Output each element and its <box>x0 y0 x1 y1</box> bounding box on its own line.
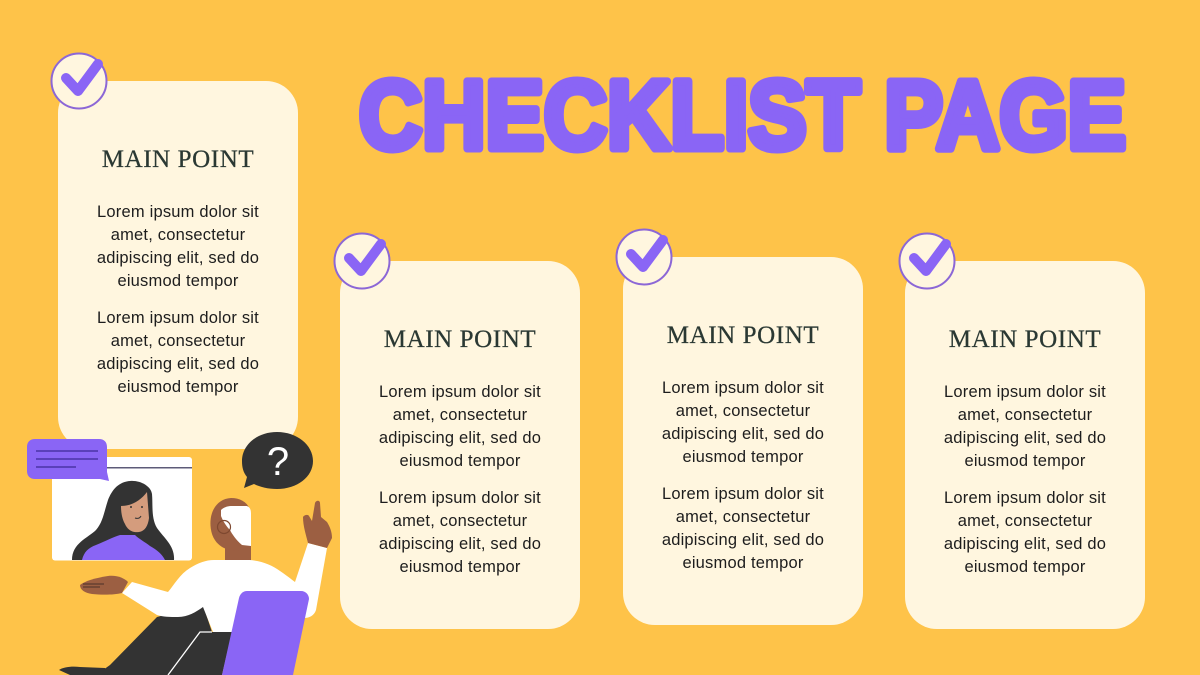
text block: panel 3 first paragraph: Lorem ipsum dolor sit <box>662 379 824 397</box>
text block: panel 3 first paragraph: amet, consectetur <box>676 402 810 420</box>
text block: panel 4 second paragraph: adipiscing elit, sed do <box>944 535 1106 553</box>
text block: panel 1 second paragraph: adipiscing elit, sed do <box>97 355 259 373</box>
text block: panel 2 second paragraph: adipiscing elit, sed do <box>379 535 541 553</box>
icon: check badge 2 <box>334 232 390 290</box>
text block: panel 4 first paragraph <box>944 383 1106 470</box>
text block: panel 1 first paragraph: eiusmod tempor <box>117 272 239 290</box>
text block: panel 4 first paragraph: adipiscing elit, sed do <box>944 429 1106 447</box>
text block: panel 4 second paragraph: Lorem ipsum dolor sit <box>944 489 1106 507</box>
text block: panel 1 first paragraph: adipiscing elit, sed do <box>97 249 259 267</box>
text block: panel 3 second paragraph: adipiscing elit, sed do <box>662 531 824 549</box>
icon: check badge 3 <box>616 228 672 286</box>
panel: main point 1 <box>58 81 298 449</box>
text block: panel 1 second paragraph: amet, consectetur <box>111 332 245 350</box>
text block: panel 4 first paragraph: amet, consectetur <box>958 406 1092 424</box>
text block: panel 2 second paragraph: Lorem ipsum dolor sit <box>379 489 541 507</box>
icon: check badge 4 <box>898 232 956 290</box>
text block: panel 2 first paragraph: amet, consectetur <box>393 406 527 424</box>
text block: panel 4 first paragraph: Lorem ipsum dolor sit <box>944 383 1106 401</box>
text block: panel 3 second paragraph: Lorem ipsum dolor sit <box>662 485 824 503</box>
title: CHECKLIST PAGE <box>359 60 1126 170</box>
text block: panel 1 first paragraph: amet, consectetur <box>111 226 245 244</box>
text block: panel 1 second paragraph: Lorem ipsum dolor sit <box>97 309 259 327</box>
text block: panel 3 first paragraph: eiusmod tempor <box>682 448 804 466</box>
purple speech bubble <box>27 439 109 481</box>
text block: panel 4 second paragraph: eiusmod tempor <box>964 558 1086 576</box>
text block: panel 2 first paragraph: eiusmod tempor <box>399 452 521 470</box>
purple chair <box>222 591 309 675</box>
text block: panel 1 second paragraph: eiusmod tempor <box>117 378 239 396</box>
heading: main point 2: MAIN POINT <box>384 326 536 353</box>
text block: panel 4 second paragraph <box>944 489 1106 576</box>
heading: main point 1: MAIN POINT <box>102 146 254 173</box>
text block: panel 4 second paragraph: amet, consectetur <box>958 512 1092 530</box>
heading: main point 4: MAIN POINT <box>949 326 1101 353</box>
dark question bubble <box>242 432 313 489</box>
text block: panel 2 first paragraph: Lorem ipsum dolor sit <box>379 383 541 401</box>
text block: panel 3 second paragraph: eiusmod tempor <box>682 554 804 572</box>
panel: main point 2 <box>340 261 580 629</box>
text block: panel 1 second paragraph <box>97 309 259 396</box>
text block: panel 3 first paragraph <box>662 379 824 466</box>
woman on video call <box>72 481 174 560</box>
text block: panel 2 second paragraph: eiusmod tempor <box>399 558 521 576</box>
text block: panel 2 second paragraph <box>379 489 541 576</box>
text block: panel 2 second paragraph: amet, consectetur <box>393 512 527 530</box>
text block: panel 2 first paragraph <box>379 383 541 470</box>
text block: panel 4 first paragraph: eiusmod tempor <box>964 452 1086 470</box>
icon: check badge 1 <box>50 52 108 110</box>
heading: main point 3: MAIN POINT <box>667 322 819 349</box>
text block: panel 3 first paragraph: adipiscing elit, sed do <box>662 425 824 443</box>
man seated <box>59 498 332 675</box>
text block: panel 1 first paragraph <box>97 203 259 290</box>
text block: panel 2 first paragraph: adipiscing elit, sed do <box>379 429 541 447</box>
text block: panel 3 second paragraph: amet, consectetur <box>676 508 810 526</box>
video call window <box>52 457 192 560</box>
text block: panel 3 second paragraph <box>662 485 824 572</box>
text block: panel 1 first paragraph: Lorem ipsum dolor sit <box>97 203 259 221</box>
panel: main point 4 <box>905 261 1145 629</box>
dark question bubble: ? <box>267 440 289 484</box>
panel: main point 3 <box>623 257 863 625</box>
